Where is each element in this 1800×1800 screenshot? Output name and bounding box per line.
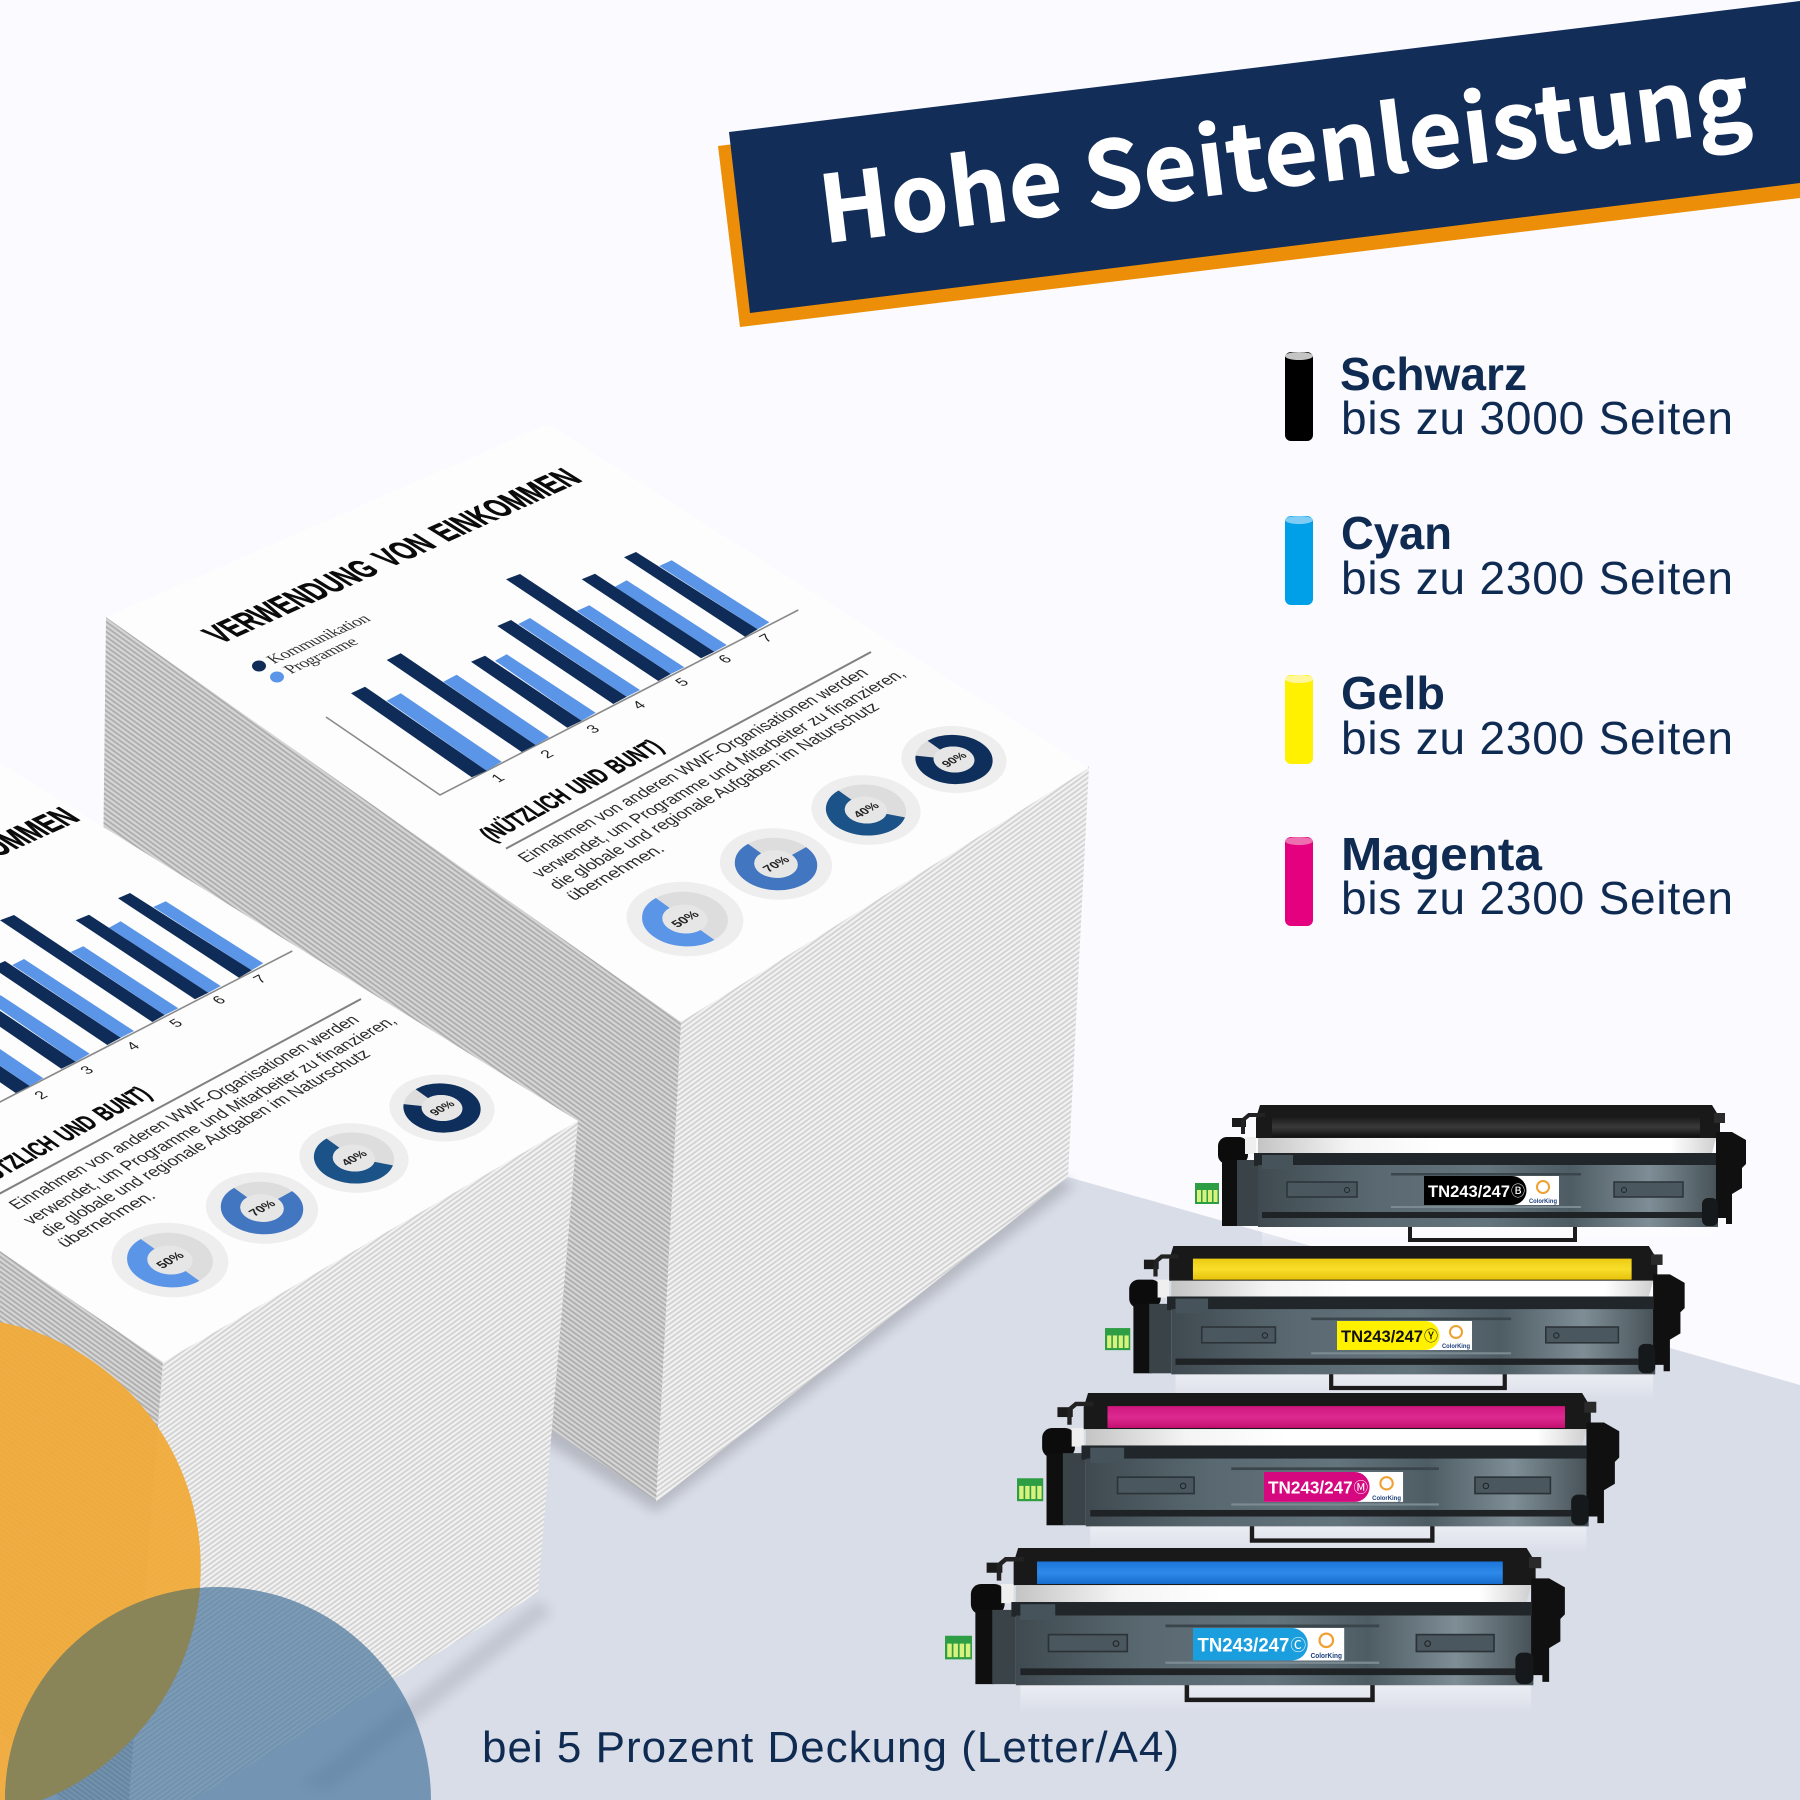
- donut 50%: [87, 1208, 253, 1312]
- bar chart: 7: [250, 973, 271, 986]
- donut 90%: [880, 712, 1028, 807]
- legend: Schwarz: [1285, 348, 1733, 444]
- bar chart: [326, 552, 798, 795]
- toner cartridge: cyan: [945, 1548, 1565, 1713]
- bar chart: 1: [488, 772, 509, 785]
- cartridge label: magenta: ColorKing: [1372, 1495, 1401, 1502]
- chart legend: Kommunikation: [262, 611, 375, 666]
- printed page: front stack: [0, 802, 516, 1312]
- paper stack: front: [0, 763, 578, 1800]
- bar chart: 7: [756, 632, 777, 645]
- bar chart: 4: [123, 1040, 144, 1053]
- front stack right side: [129, 1121, 578, 1800]
- bar chart: [0, 893, 292, 1136]
- body paragraph: verwendet, um Programme und Mitarbeiter zu finanzieren,: [527, 666, 910, 880]
- donut 50%: [602, 867, 768, 971]
- rear stack top sheet: [106, 424, 1089, 1022]
- banner orange shadow: [718, 14, 1800, 327]
- front stack left side: [0, 1251, 163, 1800]
- cartridge label: yellow: TN243/247: [1341, 1327, 1423, 1346]
- bar chart: 6: [209, 994, 230, 1007]
- donut 90%: [368, 1061, 516, 1155]
- legend: Gelb: [1285, 667, 1733, 764]
- bar chart: 5: [672, 676, 693, 689]
- rear stack right side: [656, 766, 1089, 1502]
- bar chart: 3: [77, 1064, 98, 1077]
- cartridge label: magenta: TN243/247: [1268, 1478, 1353, 1498]
- cartridge label: cyan: [1193, 1628, 1344, 1660]
- legend: Cyan: [1285, 507, 1733, 605]
- decorative blue circle: [5, 1587, 431, 1800]
- grey floor polygon: [0, 1177, 1800, 1800]
- bar chart: 5: [166, 1017, 187, 1030]
- cartridge label: magenta: Ⓜ: [1354, 1480, 1368, 1497]
- paper stack: rear: [100, 424, 1089, 1512]
- footnote: bei 5 Prozent Deckung (Letter/A4): [482, 1723, 1179, 1772]
- cartridge label: magenta: [1264, 1472, 1403, 1502]
- body paragraph: übernehmen.: [561, 841, 669, 903]
- legend: Gelb: bis zu 2300 Seiten: [1341, 712, 1733, 764]
- donut 40%: [277, 1109, 431, 1207]
- toner cartridge: black: Ⓑ: [1511, 1184, 1525, 1200]
- toner cartridge: black: ColorKing: [1529, 1198, 1557, 1205]
- legend: Schwarz: bis zu 3000 Seiten: [1341, 392, 1733, 444]
- cartridge label: yellow: Ⓨ: [1424, 1329, 1438, 1345]
- circle overlap: [5, 1588, 200, 1800]
- donut 70%: [183, 1158, 341, 1258]
- body paragraph: Einnahmen von anderen WWF-Organisationen werden: [513, 665, 873, 865]
- front stack top sheet: [0, 763, 578, 1362]
- banner navy panel: [729, 1, 1800, 313]
- legend: Cyan: bis zu 2300 Seiten: [1341, 552, 1733, 604]
- bar chart: 2: [31, 1089, 52, 1102]
- banner title: Hohe Seitenleistung: [811, 24, 1756, 270]
- cartridge label: cyan: Ⓒ: [1290, 1635, 1306, 1654]
- legend: Schwarz: Schwarz: [1340, 348, 1527, 400]
- cartridge label: yellow: ColorKing: [1442, 1343, 1470, 1350]
- body paragraph: Einnahmen von anderen WWF-Organisationen werden: [4, 1012, 364, 1212]
- legend: Magenta: bis zu 2300 Seiten: [1341, 872, 1733, 924]
- bar chart: 2: [537, 748, 558, 761]
- donut 50%: 50%: [668, 908, 703, 930]
- toner cartridge: black: [1195, 1105, 1746, 1252]
- body paragraph: die globale und regionale Aufgaben im Naturschutz: [35, 1046, 375, 1239]
- bar chart: 6: [715, 653, 736, 666]
- toner cartridge: black: TN243/247: [1428, 1182, 1510, 1201]
- icon: magenta toner cylinder: [1285, 837, 1313, 926]
- donut 70%: 70%: [760, 854, 793, 874]
- body paragraph: übernehmen.: [52, 1188, 160, 1250]
- donut 40%: 40%: [338, 1148, 371, 1168]
- chart legend: Programme: [279, 634, 363, 676]
- cartridge label: cyan: ColorKing: [1311, 1651, 1342, 1660]
- donut 90%: 90%: [939, 750, 970, 769]
- legend: Gelb: Gelb: [1341, 667, 1445, 719]
- printed page: rear stack: [193, 463, 1028, 971]
- legend: Magenta: Magenta: [1341, 828, 1542, 880]
- donut 50%: 50%: [153, 1249, 188, 1271]
- banner: [718, 1, 1800, 327]
- section heading: (NÜTZLICH UND BUNT): [472, 735, 669, 845]
- donut 70%: 70%: [246, 1198, 279, 1218]
- body paragraph: die globale und regionale Aufgaben im Naturschutz: [544, 699, 884, 892]
- donut 40%: [789, 761, 943, 859]
- legend: Cyan: Cyan: [1341, 507, 1452, 559]
- page title: VERWENDUNG VON EINKOMMEN: [193, 463, 590, 648]
- icon: cyan toner cylinder: [1285, 516, 1313, 605]
- body paragraph: verwendet, um Programme und Mitarbeiter zu finanzieren,: [18, 1013, 401, 1227]
- legend: Magenta: [1285, 828, 1733, 926]
- donut 90%: 90%: [427, 1099, 458, 1118]
- toner cartridge: magenta: [1017, 1393, 1619, 1554]
- icon: yellow toner cylinder: [1285, 675, 1313, 764]
- decorative orange circle: [0, 1322, 201, 1800]
- cartridge label: yellow: [1337, 1321, 1472, 1350]
- bar chart: 4: [629, 699, 650, 712]
- icon: black toner cylinder: [1285, 352, 1313, 441]
- cartridge label: cyan: TN243/247: [1197, 1636, 1289, 1657]
- donut 40%: 40%: [850, 800, 883, 820]
- toner cartridge: yellow: [1105, 1246, 1685, 1401]
- donut 70%: [697, 814, 855, 914]
- bar chart: 3: [583, 723, 604, 736]
- rear stack left side: [100, 617, 681, 1502]
